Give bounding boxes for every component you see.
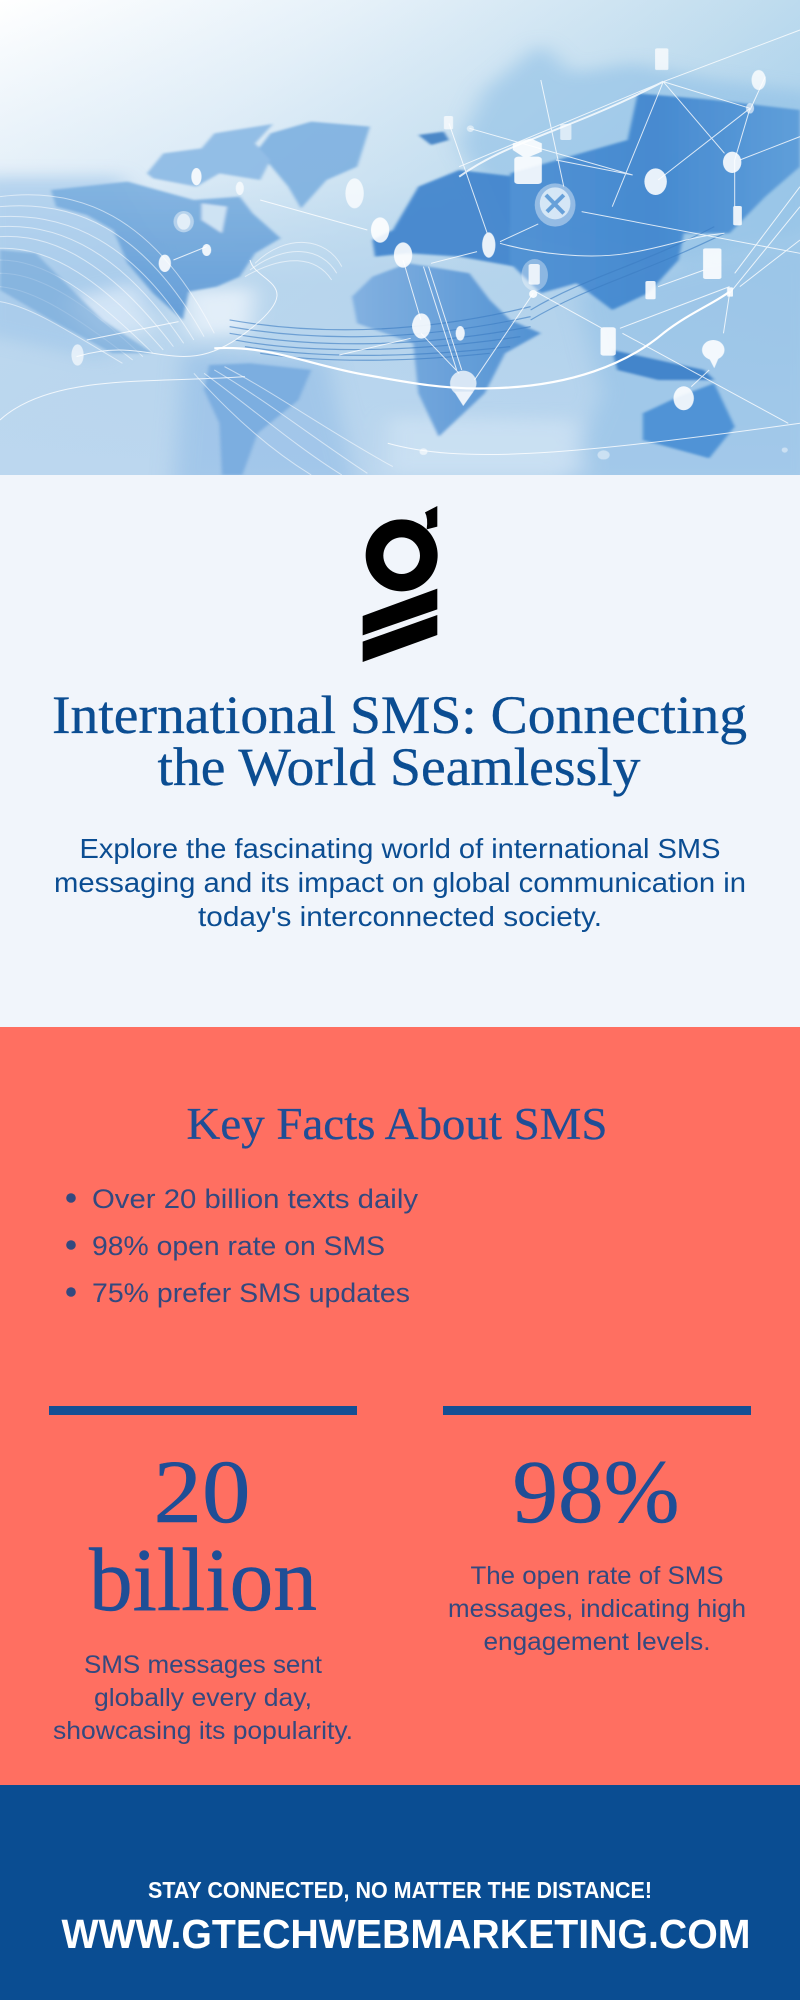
title: the World Seamlessly <box>158 737 640 797</box>
bullet list <box>66 1184 419 1308</box>
stat: 98% <box>443 1406 751 1656</box>
footer URL: WWW.GTECHWEBMARKETING.COM <box>62 1911 750 1957</box>
title <box>52 685 747 797</box>
stat: 20 billion: 20 <box>154 1443 250 1542</box>
panel: key facts <box>0 1027 800 1785</box>
stat: 20 billion: SMS messages sent <box>84 1651 322 1679</box>
footer tagline: STAY CONNECTED, NO MATTER THE DISTANCE! <box>148 1877 652 1903</box>
stat: 20 billion: globally every day, <box>94 1684 312 1712</box>
bullet list: 75% prefer SMS updates <box>92 1278 410 1308</box>
stat: 20 billion: billion <box>89 1531 317 1630</box>
network connection lines <box>0 30 800 455</box>
faded landmass shapes <box>0 43 800 487</box>
swept line waves <box>0 195 393 475</box>
striped band lower left <box>0 250 153 353</box>
glowing main curve <box>214 292 730 389</box>
dark wave band across Atlantic and Africa <box>230 227 724 360</box>
intro text: messaging and its impact on global communication in <box>54 867 746 898</box>
hero: world map network image <box>0 0 800 487</box>
icon: logo <box>363 506 438 662</box>
stat: 98%: The open rate of SMS <box>470 1562 724 1590</box>
heading: key facts: Key Facts About SMS <box>186 1099 608 1149</box>
intro text <box>54 833 746 932</box>
stat: 98%: engagement levels. <box>484 1628 710 1656</box>
stat: 20 billion <box>49 1406 357 1745</box>
panel: footer <box>0 1785 800 2000</box>
intro text: today's interconnected society. <box>198 901 602 932</box>
title: International SMS: Connecting <box>52 685 747 745</box>
world continents <box>51 93 800 475</box>
stat: 98%: messages, indicating high <box>448 1595 746 1623</box>
bullet list: Over 20 billion texts daily <box>92 1184 419 1214</box>
stat: 98%: 98% <box>512 1443 680 1542</box>
intro text: Explore the fascinating world of international SMS <box>80 833 720 864</box>
communication device nodes <box>71 48 788 460</box>
panel: intro <box>0 475 800 1027</box>
bullet list: 98% open rate on SMS <box>92 1231 385 1261</box>
stat: 20 billion: showcasing its popularity. <box>53 1717 353 1745</box>
